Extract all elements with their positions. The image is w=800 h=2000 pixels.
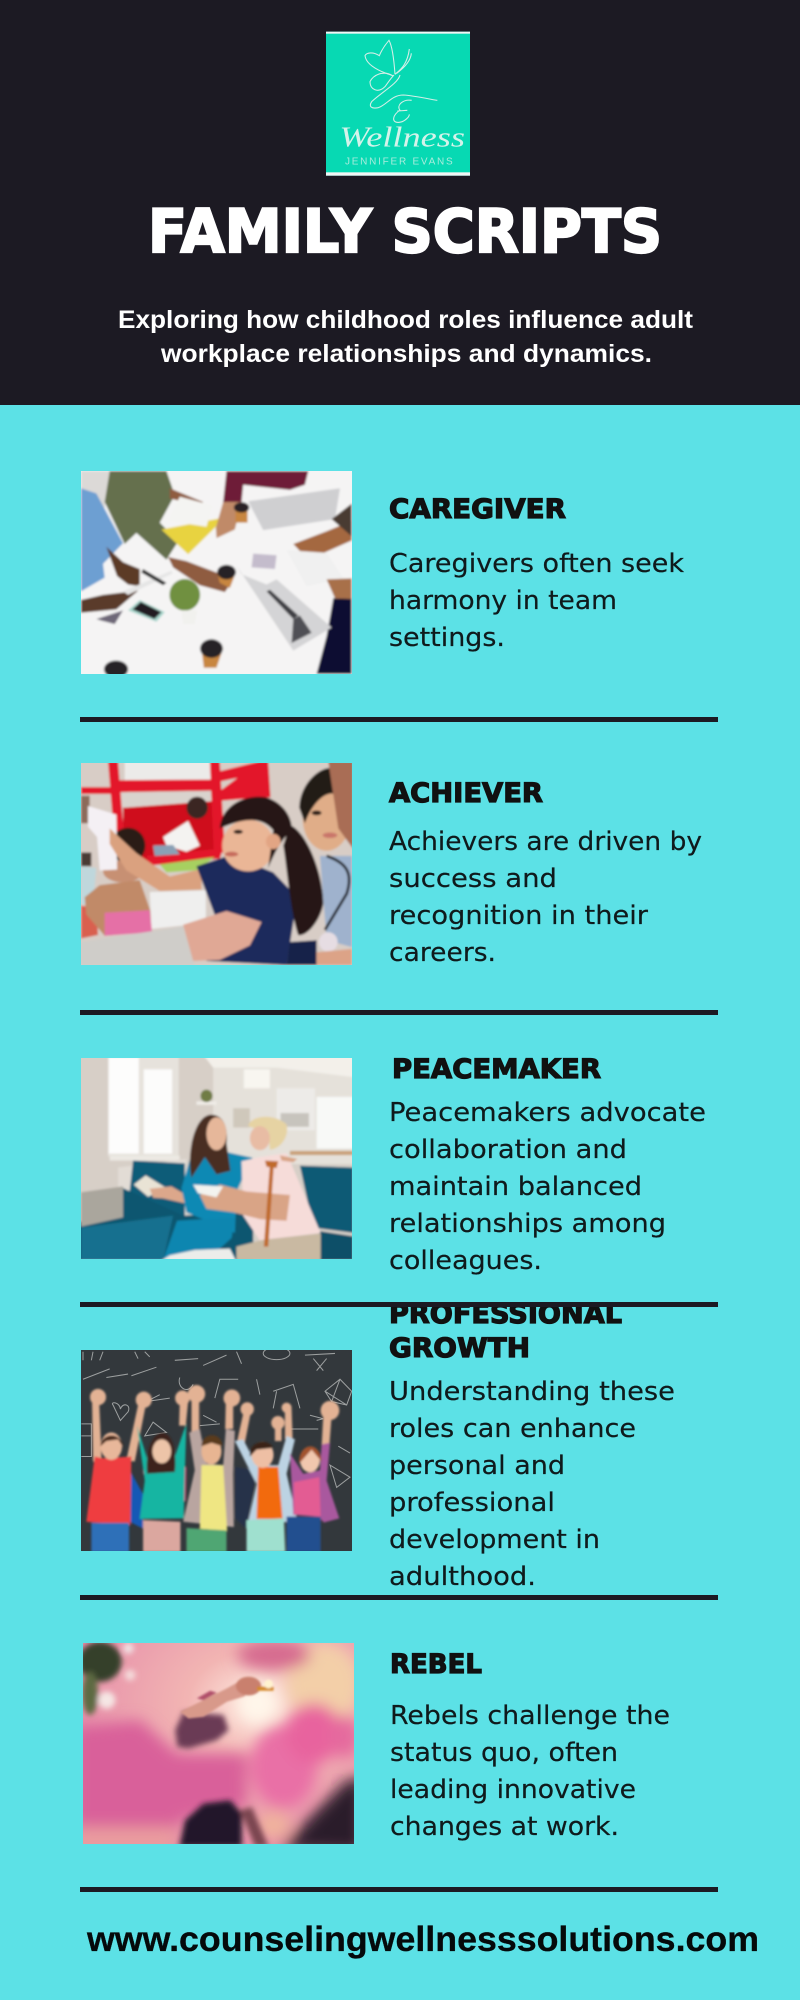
body: professional growth: roles can enhance [389,1414,636,1444]
body: achiever: success and [389,864,557,894]
header band [0,0,800,405]
body: peacemaker: colleagues. [389,1246,542,1276]
body: rebel: changes at work. [390,1812,619,1842]
body: professional growth: professional [389,1488,555,1518]
logo: JENNIFER EVANS [345,156,453,167]
photo: team meeting around a table [81,471,352,674]
body: peacemaker: maintain balanced [389,1172,642,1202]
subtitle: Exploring how childhood roles influence adult [118,306,694,334]
photo: nurse laughing with elderly woman on sofa [81,1058,352,1259]
logo [326,32,470,176]
body: caregiver: settings. [389,623,505,653]
subtitle: workplace relationships and dynamics. [160,340,652,368]
photo: figure holding a pink smoke flare [83,1643,354,1844]
heading: professional growth: GROWTH [389,1333,530,1364]
body: achiever: recognition in their [389,901,648,931]
panel: professional growth [73,1299,675,1592]
subtitle [118,306,694,368]
heading: achiever: ACHIEVER [389,778,543,809]
panel: caregiver [73,464,684,681]
body: peacemaker: relationships among [389,1209,666,1239]
body: peacemaker: Peacemakers advocate [389,1098,706,1128]
body: achiever: careers. [389,938,496,968]
body: rebel [390,1701,670,1842]
body: achiever: Achievers are driven by [389,827,702,857]
photo: children cheering at a chalkboard [81,1350,352,1551]
heading: professional growth: PROFESSIONAL [389,1299,622,1330]
body: rebel: status quo, often [390,1738,618,1768]
body: professional growth: adulthood. [389,1562,536,1592]
footer website: www.counselingwellnesssolutions.com [86,1920,759,1959]
body: rebel: leading innovative [390,1775,636,1805]
panel: peacemaker [73,1050,706,1276]
body: caregiver: harmony in team [389,586,617,616]
panel: achiever [73,756,702,973]
body: rebel: Rebels challenge the [390,1701,670,1731]
photo: children playing doctor [81,763,352,965]
body: professional growth: Understanding these [389,1377,675,1407]
heading: caregiver: CAREGIVER [389,494,566,525]
heading: rebel: REBEL [390,1649,482,1680]
body: peacemaker [389,1098,706,1276]
body: peacemaker: collaboration and [389,1135,627,1165]
body: professional growth [389,1377,675,1592]
logo: Wellness [339,122,465,154]
heading: peacemaker: PEACEMAKER [392,1054,601,1085]
title: FAMILY SCRIPTS [148,197,662,267]
body: caregiver: Caregivers often seek [389,549,684,579]
body: achiever [389,827,702,968]
heading: professional growth [389,1299,622,1364]
body: professional growth: personal and [389,1451,565,1481]
panel: rebel [73,1633,670,1854]
body: professional growth: development in [389,1525,600,1555]
body: caregiver [389,549,684,653]
